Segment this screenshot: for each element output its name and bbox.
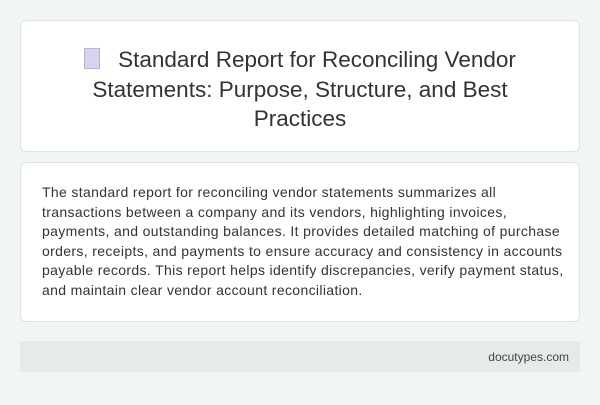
text block: transactions between a company and its vendors, highlighting invoices, — [42, 204, 507, 220]
footer text: docutypes.com — [488, 350, 569, 364]
footer — [20, 341, 580, 372]
panel: title — [20, 20, 580, 152]
text block: The standard report for reconciling vendor statements summarizes all — [42, 184, 496, 200]
title: Standard Report for Reconciling Vendor Statements: Purpose, Structure, and Best Practices — [92, 47, 516, 131]
icon: document — [84, 48, 100, 69]
text block: payments, and outstanding balances. It provides detailed matching of purchase — [42, 223, 560, 239]
text block — [42, 184, 563, 298]
text block: and maintain clear vendor account reconciliation. — [42, 282, 363, 298]
panel: description — [20, 162, 580, 322]
text block: orders, receipts, and payments to ensure accuracy and consistency in accounts — [42, 242, 562, 258]
text block: payable records. This report helps identify discrepancies, verify payment status, — [42, 262, 563, 278]
